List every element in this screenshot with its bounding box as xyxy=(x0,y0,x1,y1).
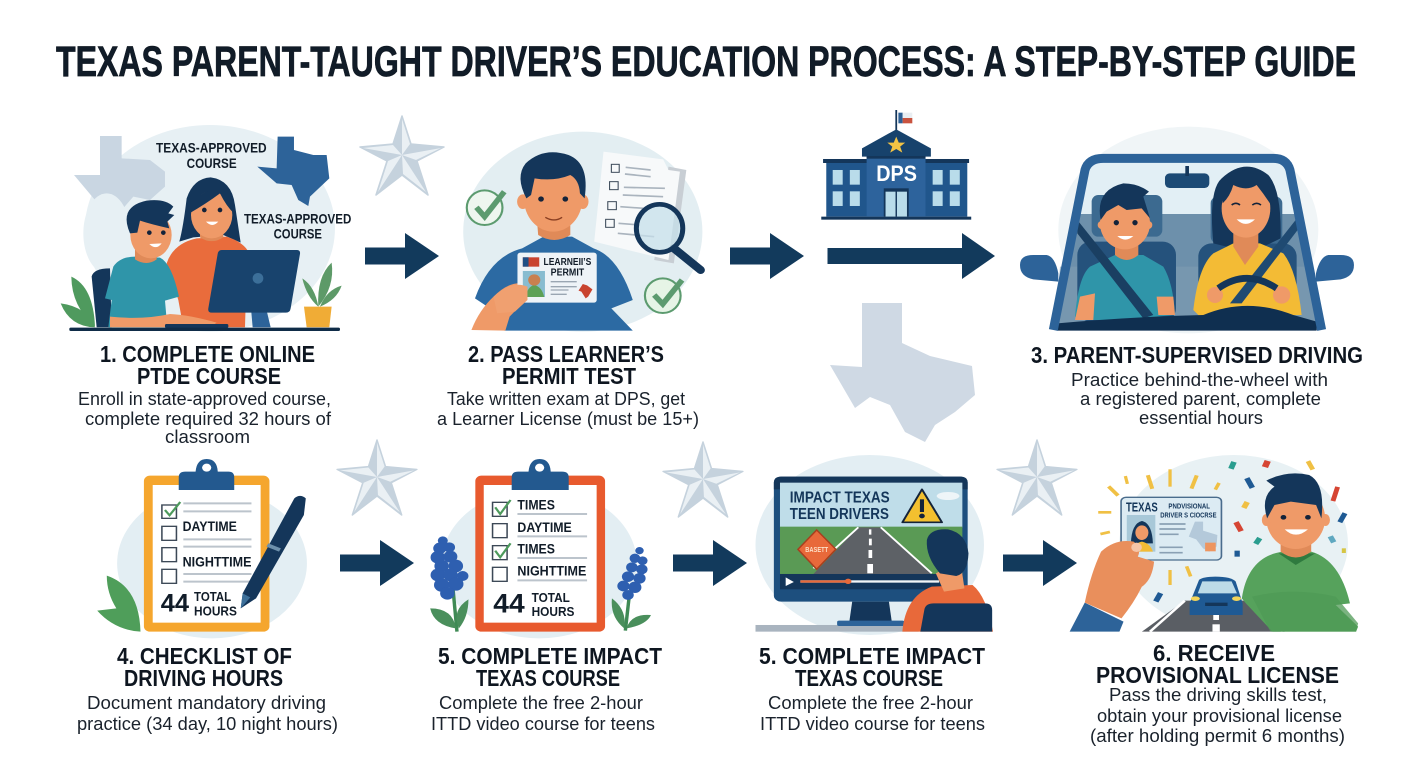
permit card: LEARNEII’S xyxy=(544,257,592,268)
label: Texas-approved course lower xyxy=(244,211,351,242)
icon: road sign xyxy=(798,530,836,569)
text: step 5 first: Complete the free 2-hour xyxy=(439,693,643,713)
clipboard: impact course: HOURS xyxy=(532,605,574,620)
license card: DRIVER S CIOCRSE xyxy=(1160,511,1217,519)
text: step 1: PTDE COURSE xyxy=(137,363,281,389)
text: step 2: PERMIT TEST xyxy=(502,363,636,389)
icon: green check bottom xyxy=(645,278,682,313)
text: step 3: essential hours xyxy=(1139,408,1263,428)
clipboard: driving hours: 44 xyxy=(161,589,189,617)
steering wheel xyxy=(1218,278,1277,288)
text: step 2: a Learner License (must be 15+) xyxy=(437,409,699,429)
panels: steps 4 and 5 clipboards xyxy=(97,459,651,638)
text: step 5 second: TEXAS COURSE xyxy=(795,665,943,691)
text: step 1: classroom xyxy=(165,427,250,447)
text: step 5 first: ITTD video course for teens xyxy=(431,714,655,734)
icon: leaf xyxy=(97,576,140,632)
text: step 1 xyxy=(78,341,332,447)
clipboard: impact course: TOTAL xyxy=(532,591,570,606)
arrow 4 xyxy=(340,540,414,586)
figure: teen holding permit xyxy=(471,152,633,331)
figure: mother driver xyxy=(1193,167,1302,318)
text: step 3 xyxy=(1031,342,1363,428)
panel illustration: step 5 video course xyxy=(756,455,993,635)
panel illustration: step 2 learner's permit xyxy=(463,132,702,332)
decorative star 2 xyxy=(337,440,417,515)
text: step 1: complete required 32 hours of xyxy=(85,409,332,429)
clipboard: driving hours: HOURS xyxy=(194,604,237,619)
icon: warning triangle xyxy=(902,489,942,522)
text: step 6: (after holding permit 6 months) xyxy=(1090,726,1345,746)
hand holding card xyxy=(1070,541,1154,632)
text: step 5 second: Complete the free 2-hour xyxy=(768,693,973,713)
clipboard: impact course xyxy=(475,459,605,632)
icon: Texas shape xyxy=(257,137,329,206)
text: step 4 xyxy=(77,643,338,734)
text: step 5 first: TEXAS COURSE xyxy=(476,665,620,691)
clipboard: impact course: DAYTIME xyxy=(517,520,572,536)
label: Texas-approved course top: TEXAS-APPROVED xyxy=(156,139,267,155)
clipboard: driving hours: DAYTIME xyxy=(183,519,237,535)
panel illustration: step 6 provisional license xyxy=(1070,455,1358,632)
icon: potted plant xyxy=(302,263,342,327)
text: step 6: Pass the driving skills test, xyxy=(1109,685,1327,705)
clipboard: impact course: NIGHTTIME xyxy=(517,563,586,579)
decorative star 1 xyxy=(360,116,444,195)
icon: DPS building xyxy=(821,110,971,220)
arrow 3 long xyxy=(828,233,995,279)
icon: test paper xyxy=(594,152,686,263)
icon: pen xyxy=(241,496,306,608)
icon: bluebonnet right xyxy=(612,547,651,631)
text: step 3: a registered parent, complete xyxy=(1080,389,1321,409)
road xyxy=(1142,601,1285,632)
text: step 5 second: 5. COMPLETE IMPACT xyxy=(759,643,985,669)
text: step 3: 3. PARENT-SUPERVISED DRIVING xyxy=(1031,342,1363,368)
clipboard: driving hours xyxy=(144,459,269,632)
figure: new driver xyxy=(1242,473,1358,632)
desk xyxy=(69,328,340,331)
permit card xyxy=(517,253,597,303)
text: step 5 first xyxy=(431,643,662,734)
clipboard: driving hours: TOTAL xyxy=(194,590,231,605)
text: step 6: 6. RECEIVE xyxy=(1153,640,1275,666)
label: Texas-approved course top: COURSE xyxy=(187,155,237,171)
text: step 2 xyxy=(437,341,699,429)
figure: viewer xyxy=(902,529,993,632)
icon: magnifying glass xyxy=(636,204,701,270)
arrow 5 xyxy=(673,540,747,586)
text: step 2: Take written exam at DPS, get xyxy=(447,389,685,409)
monitor: TEEN DRIVERS xyxy=(790,505,889,523)
text: step 6: PROVISIONAL LICENSE xyxy=(1096,662,1339,688)
icon: green check top xyxy=(467,190,504,225)
clipboard: driving hours: NIGHTTIME xyxy=(183,554,251,570)
text: step 3: Practice behind-the-wheel with xyxy=(1071,370,1328,390)
license card xyxy=(1121,497,1221,560)
monitor xyxy=(774,477,968,626)
label: Texas-approved course lower: TEXAS-APPROVED xyxy=(244,211,351,227)
icon: DPS building: DPS xyxy=(876,161,917,186)
label: Texas-approved course top xyxy=(156,139,267,171)
arrow 6 xyxy=(1003,540,1077,586)
text: step 4: 4. CHECKLIST OF xyxy=(117,643,292,669)
license card: PNDVISIONAL xyxy=(1168,502,1210,510)
text: step 1: 1. COMPLETE ONLINE xyxy=(100,341,315,367)
permit card: PERMIT xyxy=(551,268,584,279)
panel illustration: step 3 car interior xyxy=(1020,127,1354,333)
license card: TEXAS xyxy=(1126,500,1158,514)
arrow 1 xyxy=(365,233,439,279)
text: step 2: 2. PASS LEARNER’S xyxy=(468,341,664,367)
clipboard: impact course: TIMES xyxy=(517,542,555,557)
text: step 1: Enroll in state-approved course, xyxy=(78,389,331,409)
text: step 5 second: ITTD video course for teens xyxy=(760,714,985,734)
icon: computer monitor xyxy=(165,250,300,328)
figure: mother xyxy=(167,177,247,327)
decorative star 3 xyxy=(663,442,743,517)
windshield frame xyxy=(1053,158,1322,330)
monitor: IMPACT TEXAS xyxy=(790,488,890,506)
icon: blue car xyxy=(1190,577,1243,615)
label: Texas-approved course lower: COURSE xyxy=(274,226,322,242)
text: step 4: practice (34 day, 10 night hours) xyxy=(77,714,338,734)
figure: son xyxy=(92,200,217,327)
icon: bluebonnet left xyxy=(430,536,468,632)
clipboard: impact course: 44 xyxy=(493,589,525,619)
figure: son passenger xyxy=(1075,183,1176,322)
clipboard: impact course: TIMES xyxy=(517,498,555,513)
text: step 6 xyxy=(1090,640,1345,746)
text: step 5 second xyxy=(759,643,985,734)
decorative star 4 xyxy=(997,440,1077,515)
text: step 6: obtain your provisional license xyxy=(1097,706,1342,726)
panel illustration: step 1 online course xyxy=(61,125,351,332)
arrow 2 xyxy=(730,233,804,279)
icon: road sign: BASETT xyxy=(805,546,828,554)
icon: left plant xyxy=(61,277,95,327)
text: step 5 first: 5. COMPLETE IMPACT xyxy=(438,643,662,669)
confetti xyxy=(1098,460,1347,603)
dashboard xyxy=(1057,306,1317,331)
icon: light Texas silhouette centre xyxy=(830,303,975,442)
text: step 4: DRIVING HOURS xyxy=(124,665,283,691)
text: step 4: Document mandatory driving xyxy=(87,693,326,713)
